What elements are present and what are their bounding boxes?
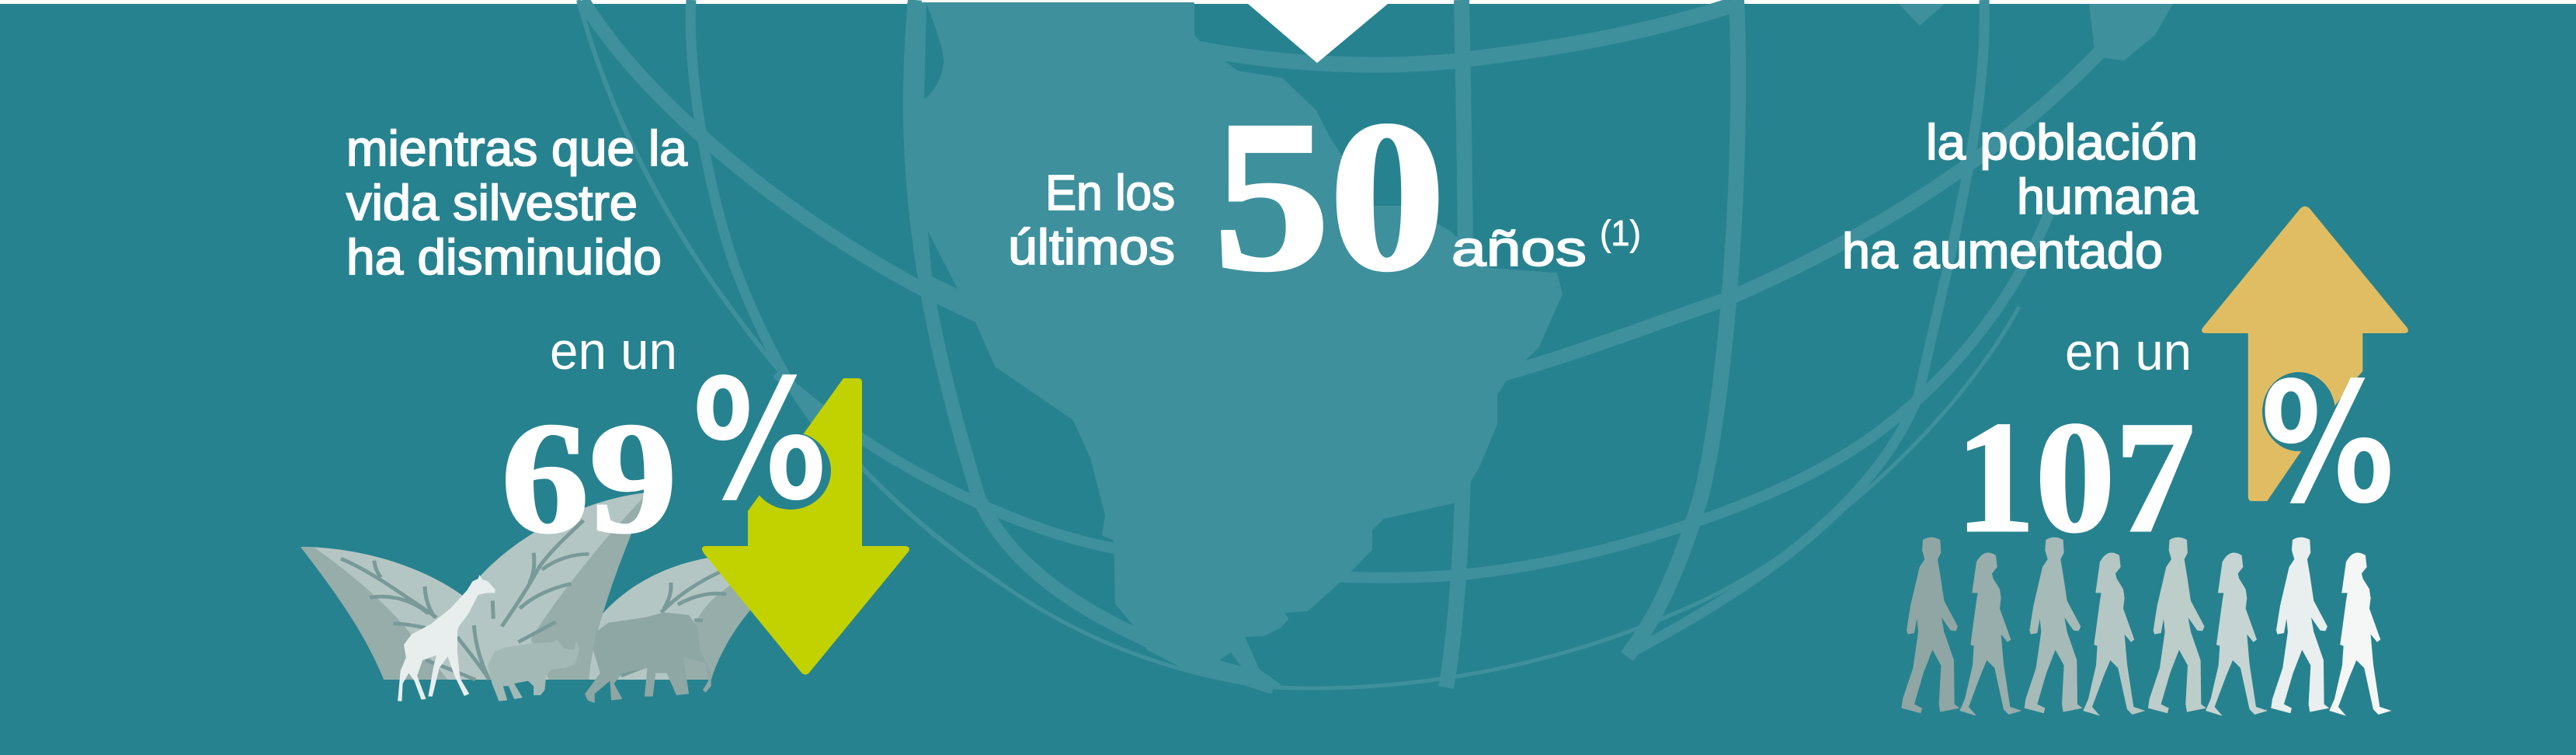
text: en un: en un: [550, 322, 677, 381]
top latitude line: [1188, 4, 1736, 64]
person 5: [2148, 538, 2206, 713]
icon: elephant: [585, 612, 711, 703]
top white band: [0, 0, 2576, 4]
icon: green down arrow: [702, 378, 909, 674]
sea gap near Pacific coast: [928, 231, 958, 289]
percent halo: [750, 432, 831, 510]
white pointer triangle: [1248, 4, 1388, 63]
text: en un: en un: [2065, 322, 2192, 381]
lower latitude line: [777, 210, 2050, 578]
far left longitude line: [690, 0, 854, 466]
number: 50: 50: [1214, 77, 1445, 315]
right longitude line: [1627, 0, 1738, 656]
globe illustration: [579, 0, 2173, 688]
wildlife heading: vida silvestre: [346, 175, 638, 231]
text: últimos: últimos: [1008, 219, 1175, 275]
icon: leaves: [301, 492, 767, 680]
number: 107: 107: [1955, 389, 2195, 565]
continent: the Americas: [909, 4, 1561, 687]
population heading: [1842, 114, 2198, 279]
outer left arc: [579, 0, 999, 583]
population heading: ha aumentado: [1842, 223, 2163, 279]
footnote marker: (1): [1600, 213, 1641, 253]
icon: rhino: [488, 639, 579, 701]
text: años: años: [1451, 221, 1587, 277]
icon: yellow up arrow: [2202, 207, 2408, 501]
text: En los: En los: [1045, 165, 1175, 221]
left panel: wildlife: [301, 120, 909, 703]
sea gaps at southern tip: [1219, 652, 1274, 684]
central longitude line: [1446, 0, 1465, 687]
left longitude line: [910, 0, 1274, 687]
upper latitude line: [582, 0, 2112, 404]
person 1: [1901, 538, 1959, 713]
population heading: la población: [1926, 114, 2198, 170]
animals: [398, 575, 711, 703]
symbol: percent: %: [693, 344, 826, 538]
person 8: [2329, 552, 2391, 716]
number: 69: 69: [501, 390, 677, 566]
land fragment top: [1899, 4, 1945, 26]
person 2: [1959, 552, 2022, 716]
people walking: [1901, 538, 2391, 716]
person 7: [2271, 538, 2329, 713]
person 4: [2083, 552, 2145, 716]
symbol: percent: %: [2261, 347, 2394, 541]
far right longitude line: [1631, 0, 1984, 652]
percent halo: [2262, 372, 2335, 451]
land sliver top right: [2089, 4, 2173, 61]
outer bottom arc: [999, 307, 2019, 688]
wildlife heading: ha disminuido: [346, 229, 662, 285]
population heading: humana: [2017, 169, 2198, 224]
person 3: [2025, 538, 2083, 713]
right panel: human population: [1842, 114, 2408, 716]
wildlife heading: [346, 120, 687, 285]
wildlife heading: mientras que la: [346, 120, 687, 176]
person 6: [2206, 552, 2268, 716]
sea gap near Alaska: [924, 4, 944, 99]
icon: giraffe: [398, 575, 495, 701]
centre heading: [1008, 77, 1641, 315]
